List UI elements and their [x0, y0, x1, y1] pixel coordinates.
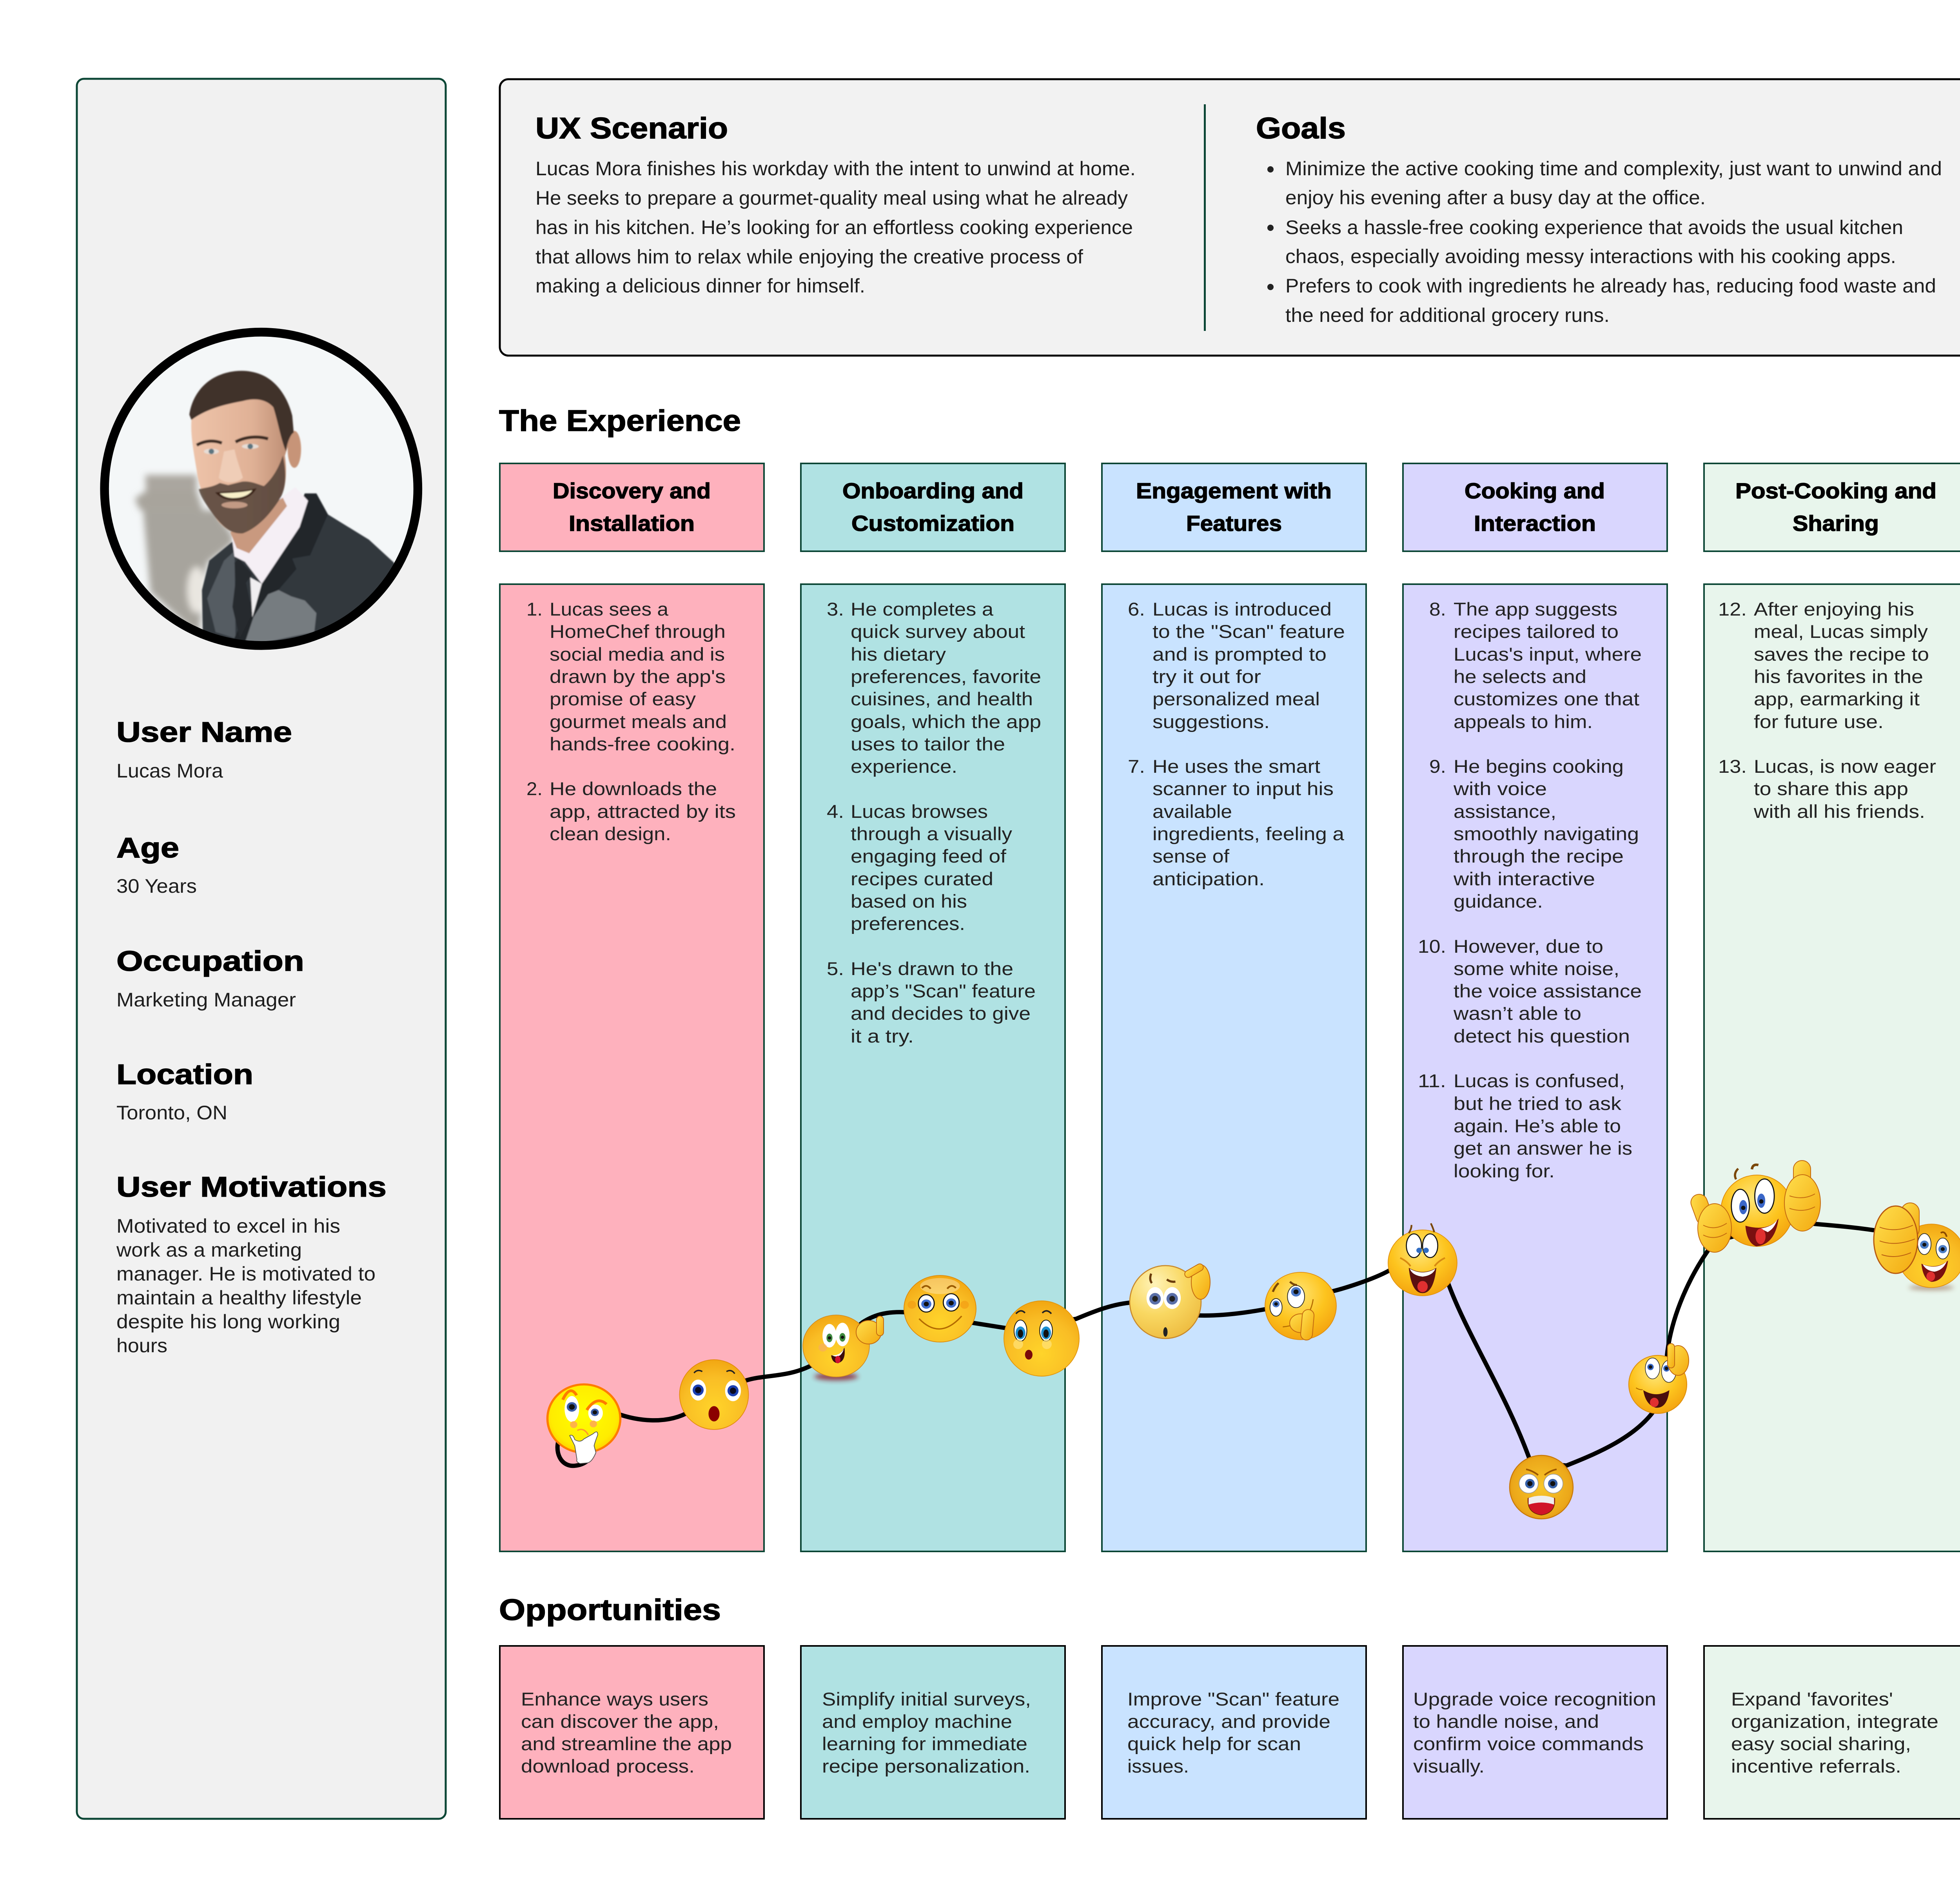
text: goals list: the need for additional grocery runs.: [1285, 304, 1610, 326]
icon: screaming angry face: [1510, 1455, 1573, 1519]
column: onboarding steps: and decides to give: [851, 1003, 1031, 1024]
heading: UX Scenario: UX Scenario: [535, 112, 728, 145]
column: post-cooking steps: app, earmarking it: [1754, 688, 1920, 709]
heading: Opportunities: Opportunities: [499, 1593, 721, 1627]
column: cooking steps: He begins cooking: [1454, 756, 1624, 777]
column: engagement steps: He uses the smart: [1152, 756, 1320, 777]
header: Engagement with Features: Features: [1186, 511, 1282, 536]
opportunity: discovery: Enhance ways users: [521, 1689, 708, 1709]
column: cooking steps: through the recipe: [1454, 846, 1624, 866]
text: location: Toronto, ON: [116, 1102, 227, 1124]
column: onboarding steps: preferences, favorite: [851, 666, 1041, 687]
header: Onboarding and Customization: [801, 463, 1065, 551]
text: age: 30 Years: [116, 875, 197, 897]
column: discovery steps: promise of easy: [550, 688, 696, 709]
column: cooking steps: The app suggests: [1454, 599, 1617, 619]
opportunity: onboarding: and employ machine: [822, 1711, 1012, 1732]
column: cooking steps: 9.: [1429, 756, 1446, 777]
header: Discovery and Installation: [500, 463, 764, 551]
icon: thumbs up face: [1874, 1203, 1960, 1290]
column: cooking steps: smoothly navigating: [1454, 823, 1639, 844]
text: scenario body: [535, 158, 1136, 297]
header: Engagement with Features: [1102, 463, 1366, 551]
opportunity: onboarding: learning for immediate: [822, 1733, 1027, 1754]
column: onboarding steps: uses to tailor the: [851, 734, 1005, 754]
icon: gasping face: [1004, 1301, 1079, 1376]
column: cooking steps: get an answer he is: [1454, 1138, 1632, 1159]
column: post-cooking steps: [1704, 584, 1960, 1551]
column: cooking steps: with interactive: [1453, 868, 1595, 889]
panel: UX scenario and goals: [500, 79, 1960, 356]
text: occupation: [116, 946, 304, 1011]
opportunity: engagement: accuracy, and provide: [1127, 1711, 1330, 1732]
column: cooking steps: [1403, 584, 1667, 1551]
text: user name: Lucas Mora: [116, 760, 223, 782]
column: engagement steps: ingredients, feeling a: [1152, 823, 1345, 844]
column: onboarding steps: 3.: [827, 599, 844, 619]
text: user motivations: Motivated to excel in his: [116, 1215, 340, 1237]
text: occupation: Marketing Manager: [116, 989, 296, 1011]
column: discovery steps: [500, 584, 764, 1551]
column: cooking steps: appeals to him.: [1454, 711, 1593, 732]
opportunity: post-cooking: organization, integrate: [1731, 1711, 1938, 1732]
column: engagement steps: available: [1152, 801, 1232, 822]
text: location: [116, 1059, 253, 1124]
column: discovery steps: 2.: [526, 778, 543, 799]
chart: emotional journey curve: [557, 1222, 1880, 1466]
column: onboarding steps: based on his: [851, 891, 967, 912]
opportunity: discovery: and streamline the app: [521, 1733, 732, 1754]
opportunity: engagement: issues.: [1127, 1756, 1189, 1776]
opportunity: engagement: [1102, 1646, 1366, 1819]
header: Onboarding and Customization: Customization: [851, 511, 1014, 536]
column: cooking steps: 8.: [1429, 599, 1446, 619]
column: cooking steps: However, due to: [1454, 936, 1603, 957]
opportunity: post-cooking: easy social sharing,: [1731, 1733, 1911, 1754]
opportunity: onboarding: recipe personalization.: [822, 1756, 1030, 1776]
column: cooking steps: guidance.: [1454, 891, 1543, 912]
column: post-cooking steps: saves the recipe to: [1754, 644, 1929, 665]
column: discovery steps: social media and is: [550, 644, 725, 665]
text: user name: User Name: [116, 717, 292, 748]
column: engagement steps: to the "Scan" feature: [1152, 621, 1345, 642]
column: cooking steps: some white noise,: [1454, 958, 1619, 979]
text: user motivations: User Motivations: [116, 1171, 387, 1203]
column: cooking steps: 11.: [1418, 1070, 1446, 1091]
opportunity: cooking: [1403, 1646, 1667, 1819]
column: cooking steps: Lucas's input, where: [1454, 644, 1642, 665]
opportunity: discovery: can discover the app,: [521, 1711, 719, 1732]
text: user motivations: manager. He is motivated to: [116, 1263, 376, 1285]
text: scenario body: has in his kitchen. He’s looking for an effortless cooking experience: [535, 216, 1133, 238]
column: onboarding steps: He's drawn to the: [851, 958, 1013, 979]
column: discovery steps: hands-free cooking.: [550, 734, 735, 754]
opportunity: post-cooking: [1704, 1646, 1960, 1819]
text: scenario body: that allows him to relax while enjoying the creative process of: [535, 246, 1083, 268]
column: post-cooking steps: Lucas, is now eager: [1754, 756, 1936, 777]
opportunity: cooking: confirm voice commands: [1413, 1733, 1644, 1754]
column: cooking steps: wasn’t able to: [1453, 1003, 1581, 1024]
text: user motivations: work as a marketing: [116, 1239, 302, 1261]
text: user motivations: [116, 1171, 387, 1357]
column: engagement steps: scanner to input his: [1152, 778, 1334, 799]
icon: surprised face: [680, 1360, 749, 1429]
opportunity: cooking: visually.: [1413, 1756, 1485, 1776]
text: goals list: chaos, especially avoiding messy interactions with his cooking apps.: [1285, 245, 1896, 267]
column: onboarding steps: cuisines, and health: [851, 688, 1033, 709]
column: onboarding steps: experience.: [851, 756, 957, 777]
icon: tongue-out face with thumb: [803, 1315, 884, 1380]
text: goals list: Prefers to cook with ingredients he already has, reducing food waste and: [1285, 275, 1936, 297]
column: onboarding steps: 5.: [827, 958, 844, 979]
column: discovery steps: drawn by the app's: [550, 666, 726, 687]
column: cooking steps: with voice: [1453, 778, 1547, 799]
text: goals list: enjoy his evening after a busy day at the office.: [1285, 187, 1706, 209]
column: post-cooking steps: After enjoying his: [1754, 599, 1914, 619]
text: user motivations: maintain a healthy lifestyle: [116, 1287, 362, 1309]
column: post-cooking steps: 13.: [1718, 756, 1747, 777]
icon: relieved sweating face: [1629, 1344, 1689, 1413]
header: Cooking and Interaction: Interaction: [1474, 511, 1596, 536]
header: Post-Cooking and Sharing: Post-Cooking and: [1735, 478, 1936, 503]
opportunity: onboarding: Simplify initial surveys,: [822, 1689, 1031, 1709]
heading: The Experience: The Experience: [499, 404, 741, 438]
text: scenario body: Lucas Mora finishes his workday with the intent to unwind at home.: [535, 158, 1136, 180]
text: goals list: Minimize the active cooking time and complexity, just want to unwind and: [1285, 158, 1942, 180]
opportunity: post-cooking: incentive referrals.: [1731, 1756, 1901, 1776]
column: discovery steps: app, attracted by its: [550, 801, 736, 822]
column: engagement steps: personalized meal: [1152, 688, 1320, 709]
column: cooking steps: detect his question: [1454, 1026, 1630, 1046]
text: goals list: [1267, 158, 1942, 326]
header: Cooking and Interaction: Cooking and: [1465, 478, 1605, 503]
column: discovery steps: clean design.: [550, 823, 671, 844]
icon: thinking face: [547, 1384, 620, 1464]
column: discovery steps: gourmet meals and: [550, 711, 727, 732]
icon: pondering face: [1265, 1272, 1336, 1340]
column: onboarding steps: He completes a: [851, 599, 994, 619]
column: engagement steps: suggestions.: [1152, 711, 1270, 732]
text: scenario body: making a delicious dinner for himself.: [535, 275, 865, 297]
text: user motivations: hours: [116, 1335, 167, 1357]
text: age: Age: [116, 832, 179, 864]
text: user motivations: despite his long working: [116, 1311, 340, 1333]
opportunity: cooking: to handle noise, and: [1413, 1711, 1599, 1732]
column: engagement steps: Lucas is introduced: [1152, 599, 1332, 619]
column: discovery steps: Lucas sees a: [550, 599, 669, 619]
column: onboarding steps: preferences.: [851, 913, 965, 934]
header: Onboarding and Customization: Onboarding and: [842, 478, 1024, 503]
column: post-cooking steps: for future use.: [1754, 711, 1884, 732]
column: post-cooking steps: meal, Lucas simply: [1754, 621, 1928, 642]
header: Discovery and Installation: Discovery and: [553, 478, 711, 503]
column: onboarding steps: engaging feed of: [851, 846, 1007, 866]
text: goals list: Seeks a hassle-free cooking experience that avoids the usual kitchen: [1285, 216, 1903, 238]
icon: smiling face: [904, 1275, 976, 1342]
column: cooking steps: assistance,: [1454, 801, 1556, 822]
column: onboarding steps: it a try.: [851, 1026, 914, 1046]
header: Post-Cooking and Sharing: [1704, 463, 1960, 551]
panel: user persona: [77, 79, 446, 1819]
icon: head-scratching face: [1130, 1262, 1210, 1339]
column: engagement steps: sense of: [1152, 846, 1230, 866]
column: engagement steps: anticipation.: [1152, 868, 1265, 889]
icon: laughing face: [1388, 1223, 1457, 1296]
column: cooking steps: looking for.: [1454, 1161, 1555, 1181]
header: Engagement with Features: Engagement with: [1136, 478, 1332, 503]
heading: Goals: Goals: [1256, 112, 1346, 145]
column: post-cooking steps: his favorites in the: [1754, 666, 1923, 687]
text: location: Location: [116, 1059, 253, 1090]
opportunity: onboarding: [801, 1646, 1065, 1819]
column: onboarding steps: Lucas browses: [851, 801, 988, 822]
column: post-cooking steps: with all his friends.: [1753, 801, 1925, 822]
text: occupation: Occupation: [116, 946, 304, 977]
opportunity: discovery: [500, 1646, 764, 1819]
column: onboarding steps: recipes curated: [851, 868, 993, 889]
header: Post-Cooking and Sharing: Sharing: [1793, 511, 1879, 536]
column: onboarding steps: his dietary: [851, 644, 946, 665]
column: onboarding steps: 4.: [827, 801, 844, 822]
column: onboarding steps: goals, which the app: [851, 711, 1041, 732]
column: discovery steps: HomeChef through: [550, 621, 726, 642]
text: scenario body: He seeks to prepare a gourmet-quality meal using what he already: [535, 187, 1128, 209]
opportunity: engagement: quick help for scan: [1127, 1733, 1301, 1754]
text: age: [116, 832, 197, 897]
column: cooking steps: but he tried to ask: [1454, 1093, 1622, 1114]
column: engagement steps: 6.: [1128, 599, 1145, 619]
column: discovery steps: He downloads the: [550, 778, 717, 799]
column: cooking steps: 10.: [1418, 936, 1446, 957]
column: post-cooking steps: to share this app: [1754, 778, 1908, 799]
column: engagement steps: try it out for: [1152, 666, 1261, 687]
opportunity: cooking: Upgrade voice recognition: [1413, 1689, 1656, 1709]
header: Cooking and Interaction: [1403, 463, 1667, 551]
column: cooking steps: again. He’s able to: [1454, 1115, 1621, 1136]
column: engagement steps: 7.: [1128, 756, 1145, 777]
column: cooking steps: the voice assistance: [1454, 981, 1642, 1001]
column: discovery steps: 1.: [526, 599, 543, 619]
column: engagement steps: and is prompted to: [1152, 644, 1327, 665]
column: onboarding steps: quick survey about: [851, 621, 1025, 642]
column: post-cooking steps: 12.: [1718, 599, 1747, 619]
column: cooking steps: Lucas is confused,: [1454, 1070, 1625, 1091]
column: cooking steps: customizes one that: [1454, 688, 1639, 709]
opportunity: discovery: download process.: [521, 1756, 695, 1776]
column: cooking steps: recipes tailored to: [1454, 621, 1619, 642]
icon: double thumbs up face: [1689, 1161, 1820, 1252]
header: Discovery and Installation: Installation: [569, 511, 695, 536]
column: onboarding steps: [801, 584, 1065, 1551]
opportunity: post-cooking: Expand 'favorites': [1731, 1689, 1893, 1709]
opportunity: engagement: Improve "Scan" feature: [1127, 1689, 1339, 1709]
photo: Lucas Mora portrait: [98, 325, 427, 655]
column: onboarding steps: through a visually: [851, 823, 1013, 844]
column: cooking steps: he selects and: [1454, 666, 1586, 687]
column: engagement steps: [1102, 584, 1366, 1551]
column: onboarding steps: app’s "Scan" feature: [851, 981, 1036, 1001]
text: user name: [116, 717, 292, 782]
